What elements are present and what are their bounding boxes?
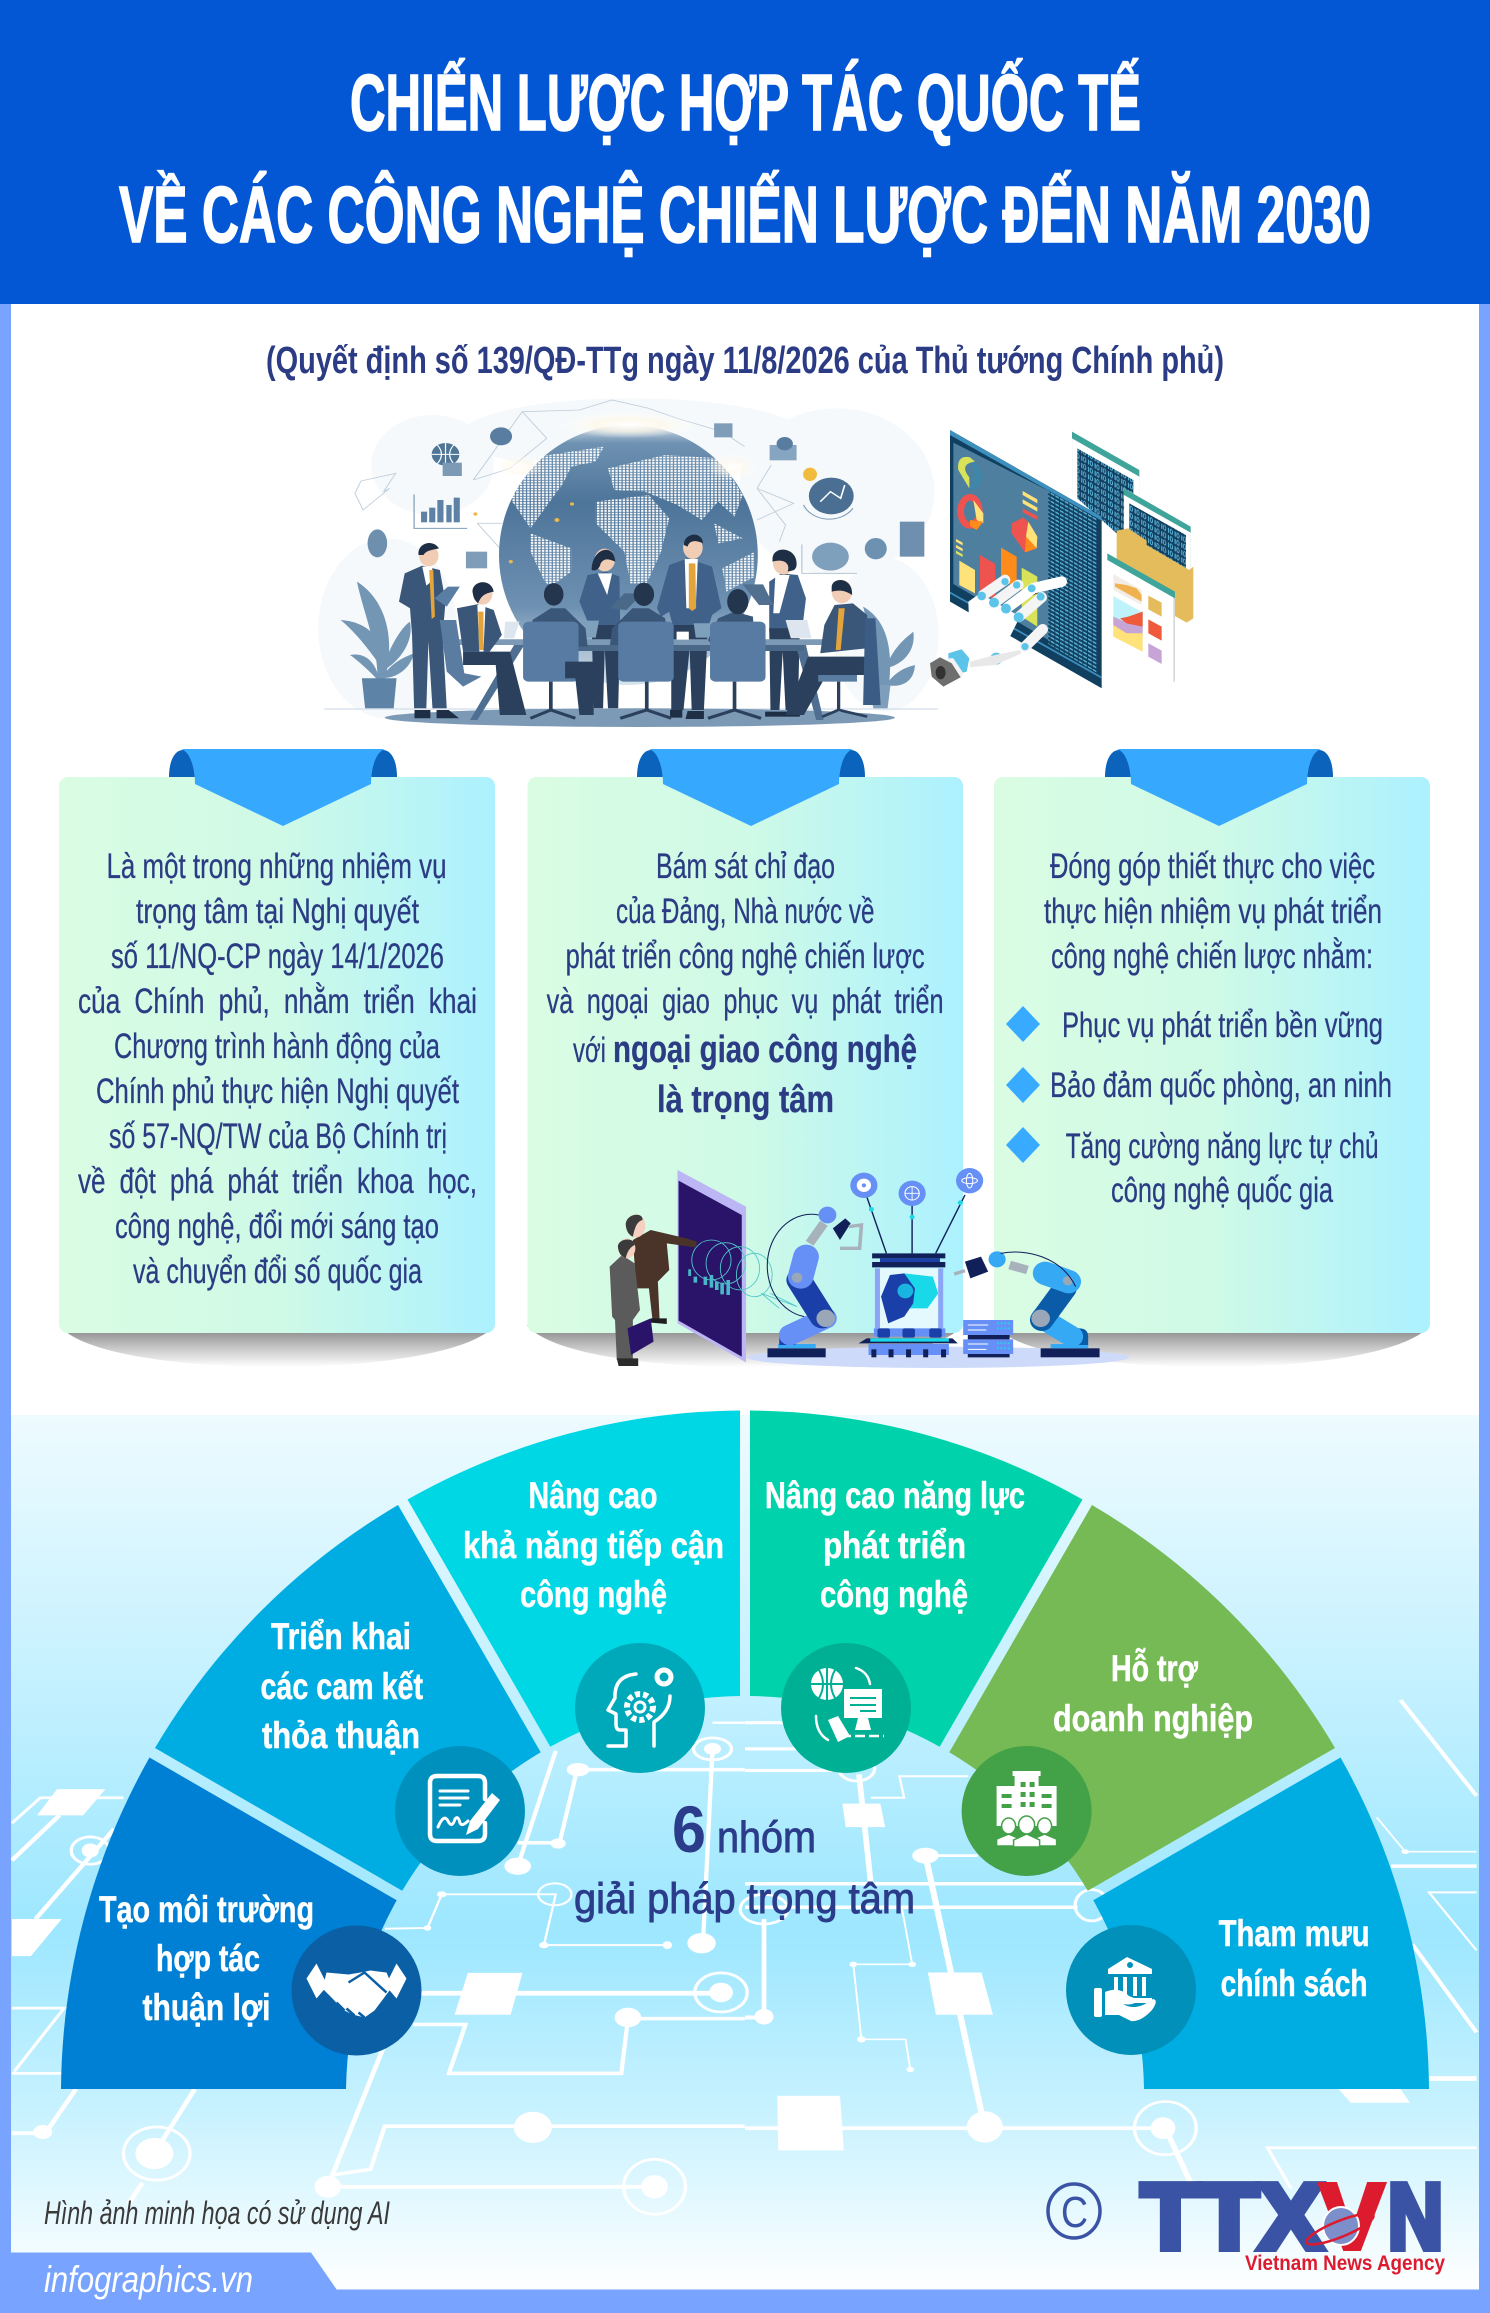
segment 4: công nghệ bbox=[820, 1574, 968, 1615]
segment 5: Hỗ trợ bbox=[1111, 1648, 1199, 1689]
chart: six solution segments semicircle bbox=[61, 1410, 1429, 2089]
AI illustration note: Hình ảnh minh họa có sử dụng AI bbox=[44, 2195, 390, 2231]
small tech icons bbox=[368, 423, 924, 573]
logo: copyright and TTXVN Vietnam News Agency: Vietnam News Agency bbox=[1245, 2252, 1445, 2275]
segment 6: chính sách bbox=[1221, 1963, 1368, 2004]
center heading: 6 groups of solutions: 6 bbox=[672, 1792, 706, 1866]
logo: copyright and TTXVN Vietnam News Agency bbox=[1048, 2164, 1445, 2275]
subtitle: (Quyết định số 139/QĐ-TTg ngày 11/8/2026 của Thủ tướng Chính phủ) bbox=[266, 340, 1224, 382]
segment 2: Triển khai bbox=[271, 1616, 411, 1657]
panel: card 3 bbox=[994, 749, 1430, 1367]
card text: trọng tâm tại Nghị quyết bbox=[136, 892, 419, 931]
logo: copyright and TTXVN Vietnam News Agency: V bbox=[1320, 2164, 1384, 2268]
segment 3: công nghệ bbox=[520, 1574, 667, 1615]
front report panel bbox=[1107, 553, 1175, 682]
segment 5: doanh nghiệp bbox=[1053, 1698, 1253, 1739]
seated people bbox=[440, 580, 881, 718]
standing people bbox=[399, 535, 806, 719]
bullet list: công nghệ quốc gia bbox=[1111, 1171, 1333, 1210]
ribbon arrow bbox=[649, 749, 853, 826]
globe bbox=[499, 425, 758, 685]
main screen bbox=[950, 430, 1102, 688]
AI lab chamber bbox=[859, 1253, 958, 1357]
segment 4 bbox=[750, 1410, 1082, 1747]
card text: và chuyển đổi số quốc gia bbox=[133, 1252, 422, 1291]
mid data panel bbox=[1124, 488, 1191, 577]
website label: infographics.vn bbox=[44, 2259, 253, 2300]
copyright mark: C bbox=[1061, 2188, 1088, 2237]
card text: của Đảng, Nhà nước về bbox=[616, 892, 874, 931]
bullet list: Phục vụ phát triển bền vững bbox=[1062, 1006, 1383, 1045]
card text bbox=[78, 847, 477, 1291]
bullet list bbox=[1006, 1006, 1392, 1210]
ribbon arrow bbox=[181, 749, 385, 826]
card text: phát triển công nghệ chiến lược bbox=[566, 937, 925, 976]
tech nodes bbox=[850, 1168, 983, 1253]
icon: office building with people bbox=[962, 1746, 1092, 1876]
illustration: business team with globe bbox=[318, 398, 939, 727]
back data panel bbox=[1072, 432, 1139, 533]
segment 1: thuận lợi bbox=[142, 1987, 270, 2028]
card text: và ngoại giao phục vụ phát triển bbox=[547, 982, 944, 1021]
logo globe bbox=[1304, 2207, 1376, 2250]
card text: thực hiện nhiệm vụ phát triển bbox=[1044, 892, 1382, 931]
center heading: 6 groups of solutions: nhóm bbox=[717, 1813, 816, 1862]
card text: số 11/NQ-CP ngày 14/1/2026 bbox=[111, 937, 444, 976]
center heading: 6 groups of solutions bbox=[574, 1792, 915, 1923]
title bbox=[119, 58, 1371, 259]
icon: bank on open hand bbox=[1066, 1925, 1196, 2055]
panel: card 1 bbox=[59, 749, 495, 1367]
card text: công nghệ chiến lược nhằm: bbox=[1051, 937, 1373, 976]
segment 1: hợp tác bbox=[156, 1938, 260, 1979]
copyright mark bbox=[1048, 2184, 1100, 2238]
logo: copyright and TTXVN Vietnam News Agency: N bbox=[1388, 2164, 1443, 2268]
card text: Đóng góp thiết thực cho việc bbox=[1050, 847, 1375, 886]
table bbox=[448, 639, 846, 645]
server rack bbox=[963, 1320, 1013, 1357]
icon: computer and globe bbox=[781, 1643, 911, 1773]
logo: copyright and TTXVN Vietnam News Agency: TTX bbox=[1141, 2164, 1323, 2268]
card text: ngoại giao công nghệ bbox=[613, 1029, 917, 1071]
card text: số 57-NQ/TW của Bộ Chính trị bbox=[109, 1117, 447, 1156]
segment 4: phát triển bbox=[823, 1525, 966, 1566]
plants bbox=[341, 582, 915, 708]
icon: head with gear bbox=[575, 1643, 705, 1773]
segment 5 bbox=[949, 1505, 1335, 1891]
right robot arm bbox=[954, 1251, 1100, 1357]
segment 6 bbox=[1093, 1758, 1429, 2089]
robot hand bbox=[930, 578, 1062, 687]
segment 1 bbox=[61, 1758, 397, 2089]
card text: với bbox=[573, 1031, 606, 1070]
segment 2: thỏa thuận bbox=[262, 1715, 420, 1756]
tablet screen bbox=[677, 1170, 797, 1362]
segment 2: các cam kết bbox=[260, 1666, 423, 1707]
illustration: robot hand touching data screens bbox=[930, 430, 1193, 688]
card text: Chính phủ thực hiện Nghị quyết bbox=[96, 1072, 459, 1111]
card text: Bám sát chỉ đạo bbox=[656, 847, 835, 886]
cloud backdrop bbox=[318, 398, 939, 718]
folder bbox=[1117, 528, 1193, 623]
segment 4: Nâng cao năng lực bbox=[765, 1475, 1025, 1516]
segment 3: Nâng cao bbox=[528, 1475, 658, 1516]
ribbon arrow bbox=[1117, 749, 1321, 826]
card text bbox=[1044, 847, 1382, 976]
segment 2 bbox=[155, 1505, 541, 1891]
panel: circuit background bbox=[11, 1415, 1479, 2291]
segment 3: khả năng tiếp cận bbox=[463, 1525, 724, 1566]
card text: Chương trình hành động của bbox=[114, 1027, 440, 1066]
left robot arm bbox=[767, 1207, 861, 1357]
segment 1: Tạo môi trường bbox=[99, 1889, 314, 1930]
segment 6: Tham mưu bbox=[1219, 1913, 1370, 1954]
card text: là trọng tâm bbox=[657, 1079, 834, 1121]
card text: về đột phá phát triển khoa học, bbox=[78, 1162, 477, 1201]
card text: Là một trong những nhiệm vụ bbox=[106, 847, 446, 886]
illustration: engineers with robot arms and AI bbox=[610, 1168, 1129, 1368]
header band bbox=[0, 0, 1490, 304]
laptops bbox=[578, 621, 599, 638]
center heading: 6 groups of solutions: giải pháp trọng tâm bbox=[574, 1875, 915, 1923]
network lines bbox=[355, 400, 794, 555]
card text: của Chính phủ, nhằm triển khai bbox=[78, 982, 477, 1021]
segment 3 bbox=[408, 1410, 740, 1747]
card text bbox=[547, 847, 944, 1121]
card text: công nghệ, đổi mới sáng tạo bbox=[115, 1207, 439, 1246]
panel: card 2 bbox=[527, 749, 963, 1367]
icon: handshake bbox=[292, 1926, 422, 2056]
icon: signed document bbox=[395, 1746, 525, 1876]
footer band bbox=[0, 2252, 1490, 2313]
men bbox=[610, 1214, 697, 1366]
